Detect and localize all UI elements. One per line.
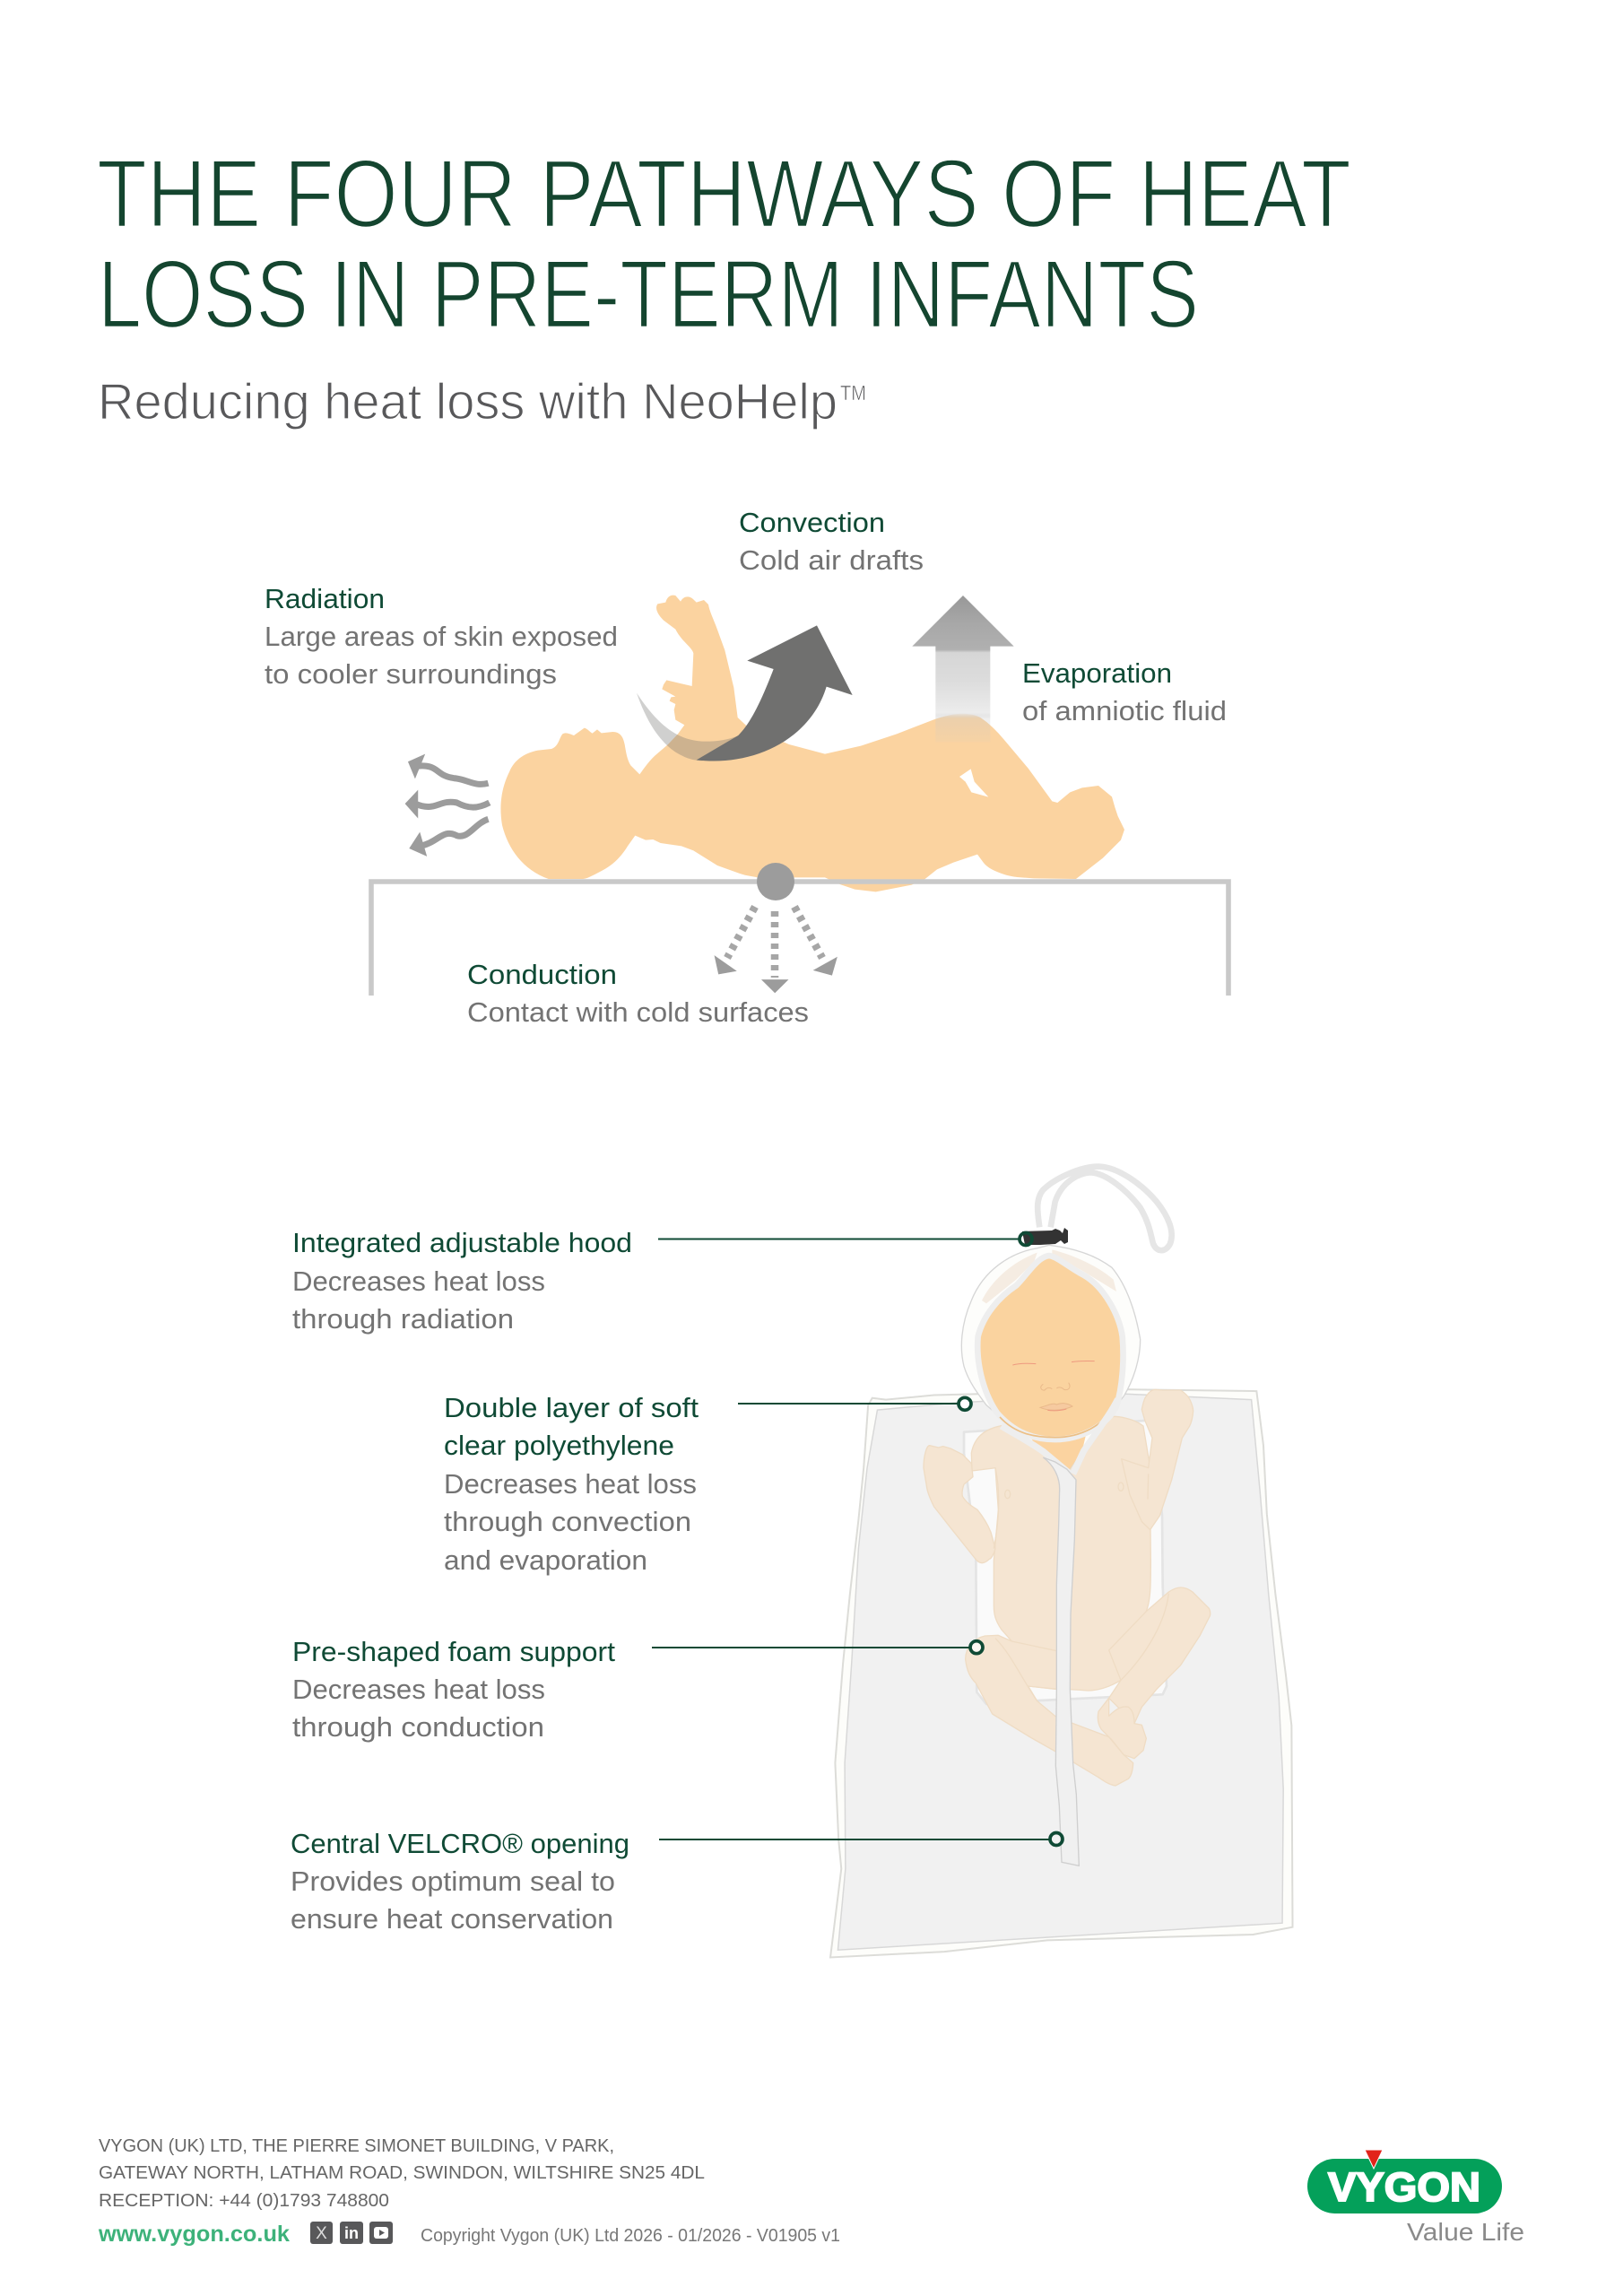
logo: Vygon: VYGON (1328, 2164, 1480, 2210)
label: conduction: Conduction (467, 959, 617, 990)
callout: double layer: through convection (444, 1506, 691, 1537)
clasp (1022, 1228, 1068, 1245)
label: radiation (265, 583, 618, 690)
subtitle: TM (840, 381, 866, 404)
evaporation wavy arrows (405, 754, 490, 857)
footer address: VYGON (UK) LTD, THE PIERRE SIMONET BUILDING, V PARK, (99, 2136, 614, 2156)
callout: velcro (291, 1828, 629, 1935)
illustration: baby in NeoHelp bag (830, 1167, 1293, 1957)
baby body (924, 1389, 1211, 1786)
label: conduction (467, 959, 809, 1028)
website: www.vygon.co.uk (98, 2222, 290, 2247)
label: evaporation: Evaporation (1022, 657, 1172, 689)
footer address: GATEWAY NORTH, LATHAM ROAD, SWINDON, WILTSHIRE SN25 4DL (99, 2163, 705, 2183)
callout: foam support: Decreases heat loss (292, 1674, 545, 1705)
callout: hood (292, 1227, 632, 1335)
polyethylene sheet (830, 1389, 1293, 1957)
neck (1022, 1426, 1088, 1471)
neck bands (1002, 1399, 1118, 1474)
label: evaporation: of amniotic fluid (1022, 695, 1227, 726)
left leg and foot (966, 1635, 1133, 1786)
radiation arrow (637, 625, 853, 761)
face details (1012, 1361, 1095, 1411)
head with hood band (977, 1256, 1124, 1439)
label: evaporation (1022, 657, 1227, 726)
label: convection: Cold air drafts (739, 544, 924, 576)
label: convection: Convection (739, 507, 885, 538)
callout: velcro: Central VELCRO® opening (291, 1828, 629, 1859)
cord loop (1037, 1167, 1172, 1250)
label: radiation: to cooler surroundings (265, 658, 557, 690)
right arm and hand (1122, 1389, 1193, 1530)
social icons (310, 2222, 393, 2244)
callout: double layer: clear polyethylene (444, 1430, 674, 1461)
callout: foam support: Pre-shaped foam support (292, 1636, 615, 1667)
callout lines and markers (652, 1232, 1063, 1846)
diagram: baby on surface, four heat loss pathways (371, 596, 1228, 996)
callout: velcro: Provides optimum seal to (291, 1866, 615, 1897)
callout: hood: Integrated adjustable hood (292, 1227, 632, 1258)
left arm and fist (924, 1446, 995, 1563)
title: THE FOUR PATHWAYS OF HEAT (97, 139, 1351, 248)
hood peach inner fold (982, 1249, 1116, 1303)
right foot (1098, 1698, 1146, 1759)
icon: YouTube (369, 2222, 393, 2244)
footer address (99, 2136, 705, 2211)
footer address: RECEPTION: +44 (0)1793 748800 (99, 2191, 389, 2211)
right thigh and shin (1109, 1587, 1211, 1724)
icon: LinkedIn: in (344, 2224, 359, 2242)
title (97, 139, 1351, 348)
hood outer (961, 1245, 1141, 1471)
label: conduction: Contact with cold surfaces (467, 996, 809, 1028)
central velcro strip (1043, 1457, 1079, 1866)
callout: double layer: and evaporation (444, 1544, 647, 1576)
conduction point and dotted arrows (715, 863, 838, 993)
callout: double layer: Double layer of soft (444, 1392, 699, 1423)
icon: X: X (316, 2224, 327, 2243)
label: radiation: Radiation (265, 583, 385, 614)
callout: hood: Decreases heat loss (292, 1265, 545, 1297)
callout: velcro: ensure heat conservation (291, 1903, 613, 1935)
baby silhouette (500, 596, 1124, 891)
title: LOSS IN PRE-TERM INFANTS (98, 239, 1199, 348)
convection arrow (912, 596, 1014, 742)
callout: foam support (292, 1636, 615, 1743)
body detail lines (994, 1414, 1168, 1701)
table surface (371, 882, 1228, 996)
label: convection (739, 507, 924, 576)
torso (971, 1416, 1150, 1691)
logo: Vygon: Value Life (1407, 2218, 1524, 2246)
label: radiation: Large areas of skin exposed (265, 621, 618, 652)
callout: double layer: Decreases heat loss (444, 1468, 697, 1500)
integrated hood and cord (961, 1167, 1172, 1474)
pre-shaped foam support (964, 1420, 1167, 1704)
copyright: Copyright Vygon (UK) Ltd 2026 - 01/2026 - V01905 v1 (421, 2226, 840, 2246)
subtitle: Reducing heat loss with NeoHelp (98, 373, 838, 430)
callout: double layer (444, 1392, 699, 1576)
callout: foam support: through conduction (292, 1711, 544, 1743)
logo: Vygon (1307, 2150, 1524, 2246)
callout: hood: through radiation (292, 1303, 514, 1335)
